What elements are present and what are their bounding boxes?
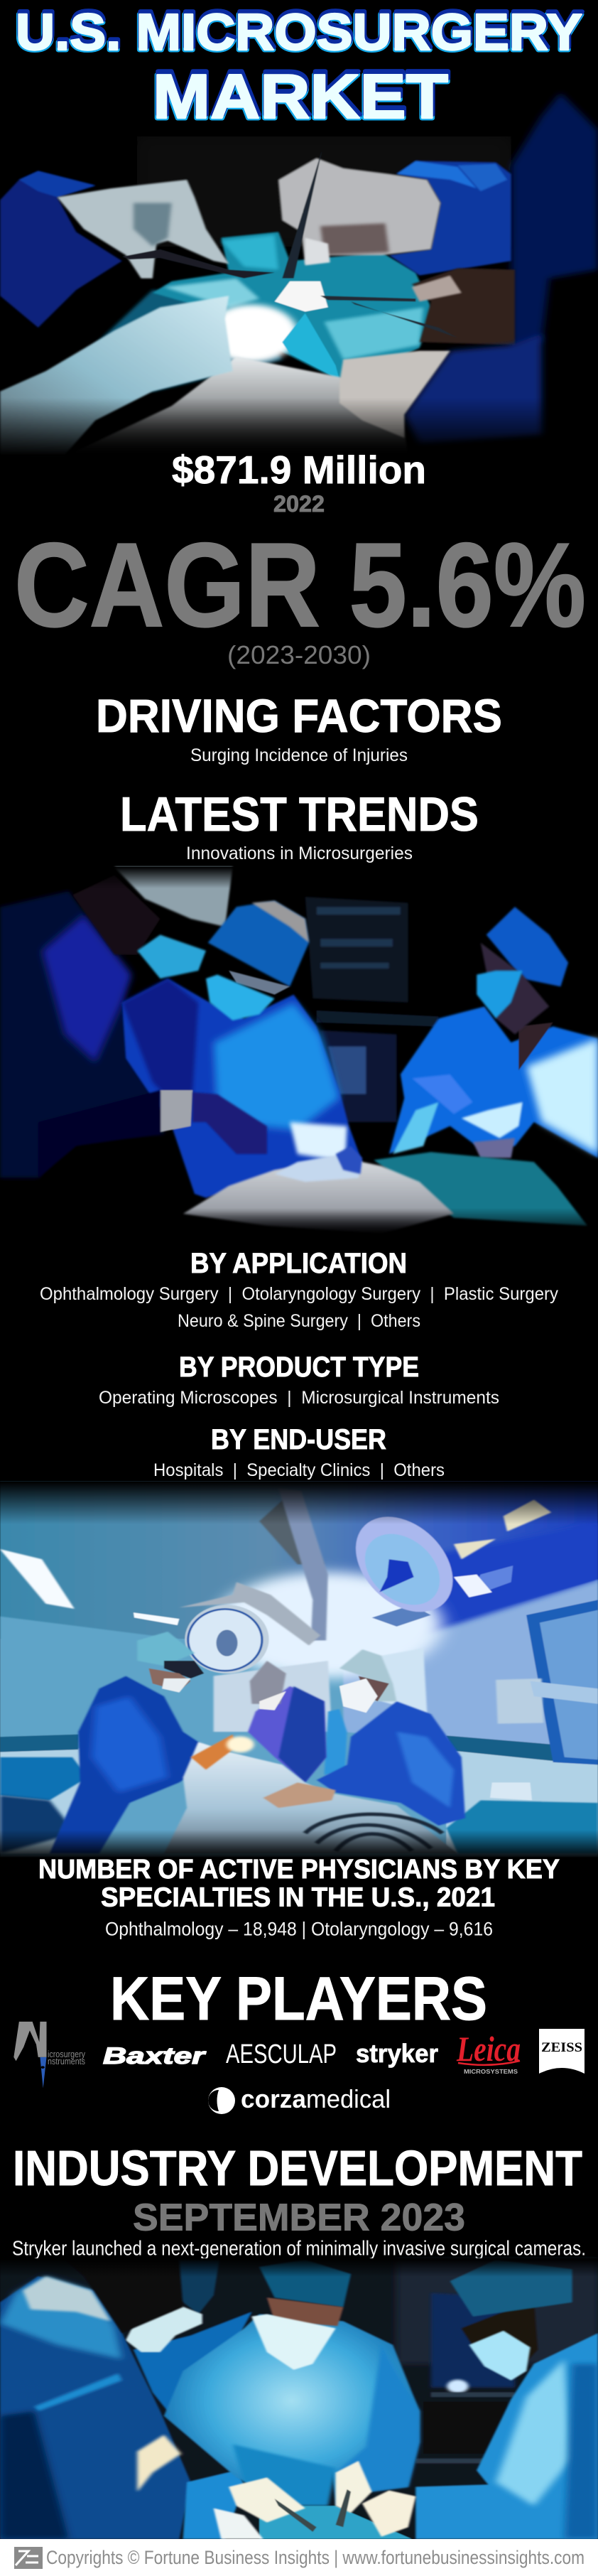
logo: Corza Medical (208, 2084, 391, 2114)
logo: Zeiss: ZEISS (541, 2040, 582, 2055)
icon: Fortune Business Insights logo (14, 2547, 43, 2569)
heading: key players: KEY PLAYERS (110, 1965, 487, 2033)
items row 1: Ophthalmology Surgery | Otolaryngology Surgery | Plastic Surgery (40, 1284, 558, 1304)
title (16, 1, 583, 131)
heading: BY PRODUCT TYPE (179, 1352, 419, 1383)
title: MARKET (153, 61, 448, 131)
logo: Leica Microsystems: MICROSYSTEMS (464, 2069, 518, 2075)
logo: Corza Medical: corza (241, 2084, 307, 2113)
heading: driving factors: DRIVING FACTORS (96, 689, 502, 742)
segmentation: by product type (99, 1352, 499, 1408)
logo: Leica Microsystems: Leica (456, 2029, 521, 2069)
logos (13, 2022, 585, 2114)
forecast period: (2023-2030) (227, 640, 371, 669)
heading: BY APPLICATION (190, 1248, 407, 1279)
physician counts: Ophthalmology – 18,948 | Otolaryngology – 9,616 (105, 1919, 493, 1940)
heading: active physicians: NUMBER OF ACTIVE PHYSICIANS BY KEY (38, 1855, 560, 1885)
segmentation: by end-user (153, 1424, 445, 1480)
logo: Corza Medical: medical (306, 2084, 391, 2113)
title: MARKET (153, 58, 449, 128)
photo: bright operating room (0, 1482, 598, 1859)
title: U.S. MICROSURGERY (16, 1, 583, 58)
logo: Aesculap: AESCULAP (226, 2039, 337, 2069)
heading: BY END-USER (211, 1424, 386, 1455)
logo: Leica Microsystems (456, 2029, 521, 2075)
footer (0, 2539, 598, 2576)
market value: $871.9 Million (172, 448, 426, 492)
items: Hospitals | Specialty Clinics | Others (153, 1460, 445, 1480)
driving factor text: Surging Incidence of Injuries (190, 745, 408, 765)
segmentation: by application (40, 1248, 558, 1331)
base year: 2022 (273, 491, 325, 517)
logo: Zeiss (539, 2029, 585, 2074)
heading: active physicians: SPECIALTIES IN THE U.S., 2021 (101, 1883, 495, 1913)
photo: surgical team in dark theatre (0, 867, 598, 1236)
title: U.S. MICROSURGERY (16, 4, 582, 61)
photo: surgeons' hands with instruments (0, 93, 598, 456)
title: MARKET (153, 61, 448, 131)
title: U.S. MICROSURGERY (16, 4, 582, 61)
logo: Microsurgery Instruments (13, 2022, 85, 2088)
trend text: Innovations in Microsurgeries (186, 844, 413, 863)
photo: surgical team in blue gowns (0, 2258, 598, 2539)
logo: Baxter: Baxter (103, 2043, 206, 2069)
development date: SEPTEMBER 2023 (133, 2196, 465, 2238)
logo: Microsurgery Instruments: icrosurgery (48, 2049, 85, 2059)
heading: latest trends: LATEST TRENDS (120, 787, 479, 841)
heading: active physicians (38, 1855, 560, 1913)
logo: Stryker: stryker (356, 2039, 438, 2068)
items row 2: Neuro & Spine Surgery | Others (178, 1311, 420, 1331)
logo: Microsurgery Instruments: nstruments (48, 2056, 85, 2066)
items: Operating Microscopes | Microsurgical Instruments (99, 1388, 499, 1408)
